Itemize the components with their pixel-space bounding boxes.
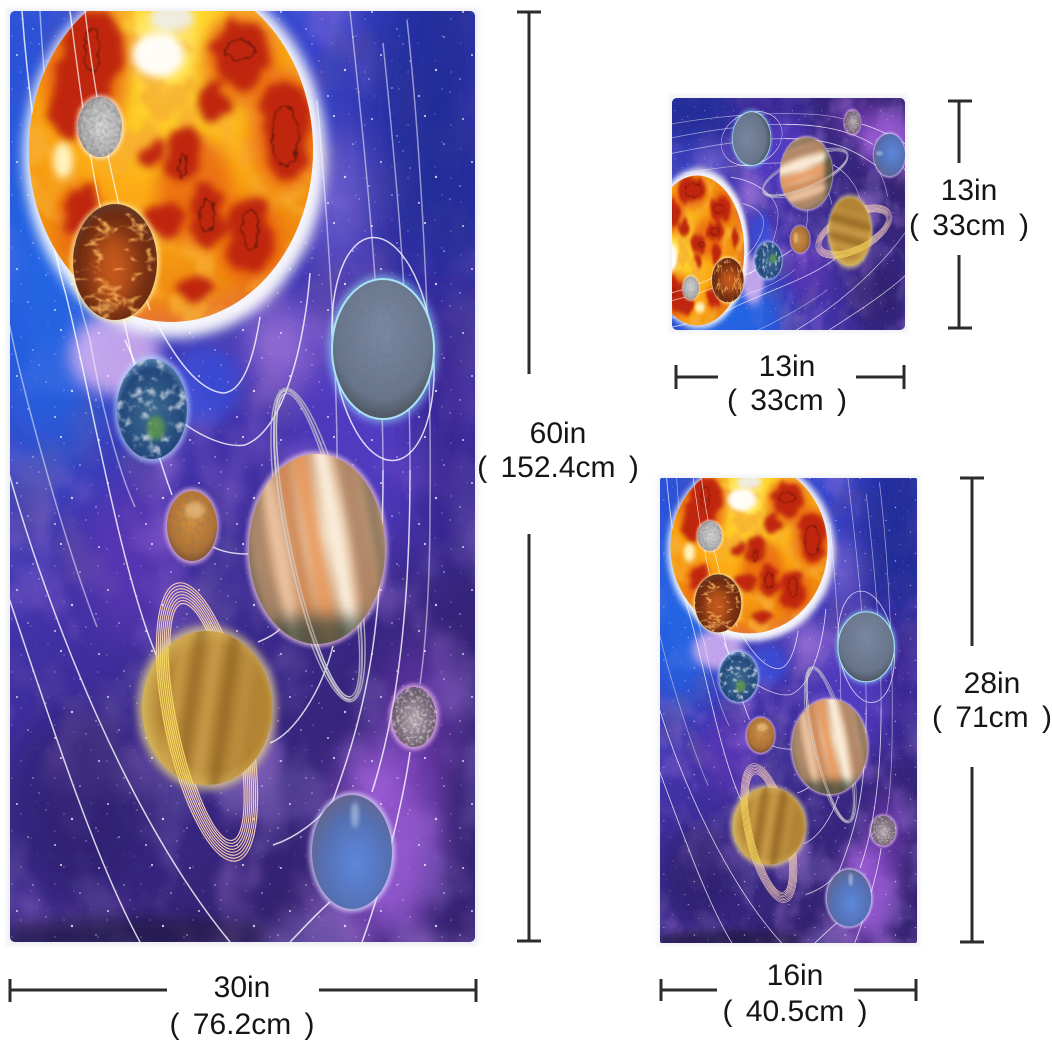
dimension: small height: 13in <box>941 174 997 207</box>
planet: earth <box>114 355 190 463</box>
dimension: small width: 13in <box>759 350 815 383</box>
planet: mars <box>165 488 219 564</box>
planet: mercury <box>76 95 124 159</box>
uranus orbit <box>322 232 444 466</box>
dimension: medium height: 28in <box>964 667 1020 700</box>
dimension: small width: ( 33cm ) <box>727 384 847 417</box>
dimension: medium width: 16in <box>767 959 823 992</box>
jupiter ring back <box>251 381 385 709</box>
dimension: small height: ( 33cm ) <box>909 209 1029 242</box>
solar system artwork <box>0 0 510 953</box>
planet: saturn <box>136 574 278 870</box>
planet: small moon <box>389 684 439 750</box>
orbit lines <box>8 11 444 942</box>
large bath towel <box>0 0 510 953</box>
dimension: small height <box>909 101 1029 328</box>
planet: uranus <box>328 275 438 423</box>
stars <box>0 0 480 950</box>
dimension: large height <box>477 12 639 941</box>
planet: neptune <box>309 792 395 912</box>
dimension: medium width <box>661 959 916 1028</box>
planet: jupiter <box>237 384 404 706</box>
small face towel <box>670 96 908 332</box>
medium hand towel <box>658 476 920 946</box>
planet: venus <box>70 202 160 322</box>
dimension: small width <box>676 350 904 417</box>
dimension: large width <box>10 971 476 1041</box>
jupiter ring front <box>256 384 380 706</box>
saturn rings front <box>136 574 278 870</box>
dimension: large width: ( 76.2cm ) <box>169 1008 315 1041</box>
dimension: large width: 30in <box>214 971 270 1004</box>
dimension: large height: 60in <box>530 417 586 450</box>
dimension: large height: ( 152.4cm ) <box>477 451 639 484</box>
dimension: medium height: ( 71cm ) <box>932 701 1052 734</box>
dimension: medium height <box>932 478 1052 942</box>
dimension: medium width: ( 40.5cm ) <box>722 995 868 1028</box>
saturn rings back <box>136 574 278 870</box>
sun <box>24 0 326 338</box>
